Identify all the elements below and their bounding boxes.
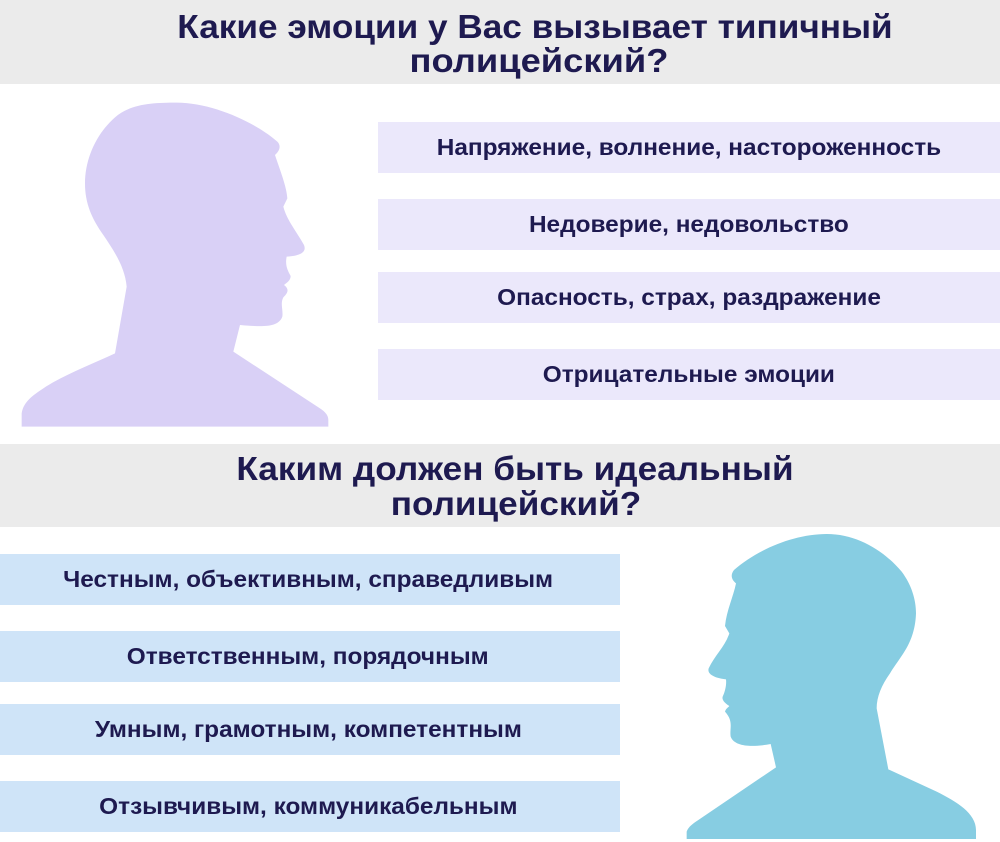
title line 2: полицейский?: [410, 43, 668, 80]
panel row: honest: Честным, объективным, справедливым: [63, 566, 553, 592]
panel row: tension: Напряжение, волнение, настороженность: [437, 134, 941, 160]
panel row: negative emotions: Отрицательные эмоции: [543, 361, 835, 387]
title line 1: Каким должен быть идеальный: [236, 451, 794, 488]
panel row: smart: Умным, грамотным, компетентным: [94, 716, 521, 742]
panel row: responsible: Ответственным, порядочным: [127, 643, 489, 669]
title line 1: Какие эмоции у Вас вызывает типичный: [177, 9, 893, 46]
panel row: honest: [0, 554, 620, 605]
panel row: danger: [378, 272, 1000, 323]
panel row: danger: Опасность, страх, раздражение: [497, 284, 881, 310]
panel row: smart: [0, 704, 620, 755]
panel row: negative emotions: [378, 349, 1000, 400]
heading band: typical policeman: [0, 0, 1000, 84]
panel row: responsive: Отзывчивым, коммуникабельным: [99, 793, 517, 819]
heading band: ideal policeman: [0, 444, 1000, 527]
panel row: responsible: [0, 631, 620, 682]
panel row: distrust: Недоверие, недовольство: [529, 211, 849, 237]
panel row: distrust: [378, 199, 1000, 250]
panel row: tension: [378, 122, 1000, 173]
title line 2: полицейский?: [391, 486, 641, 523]
panel row: responsive: [0, 781, 620, 832]
